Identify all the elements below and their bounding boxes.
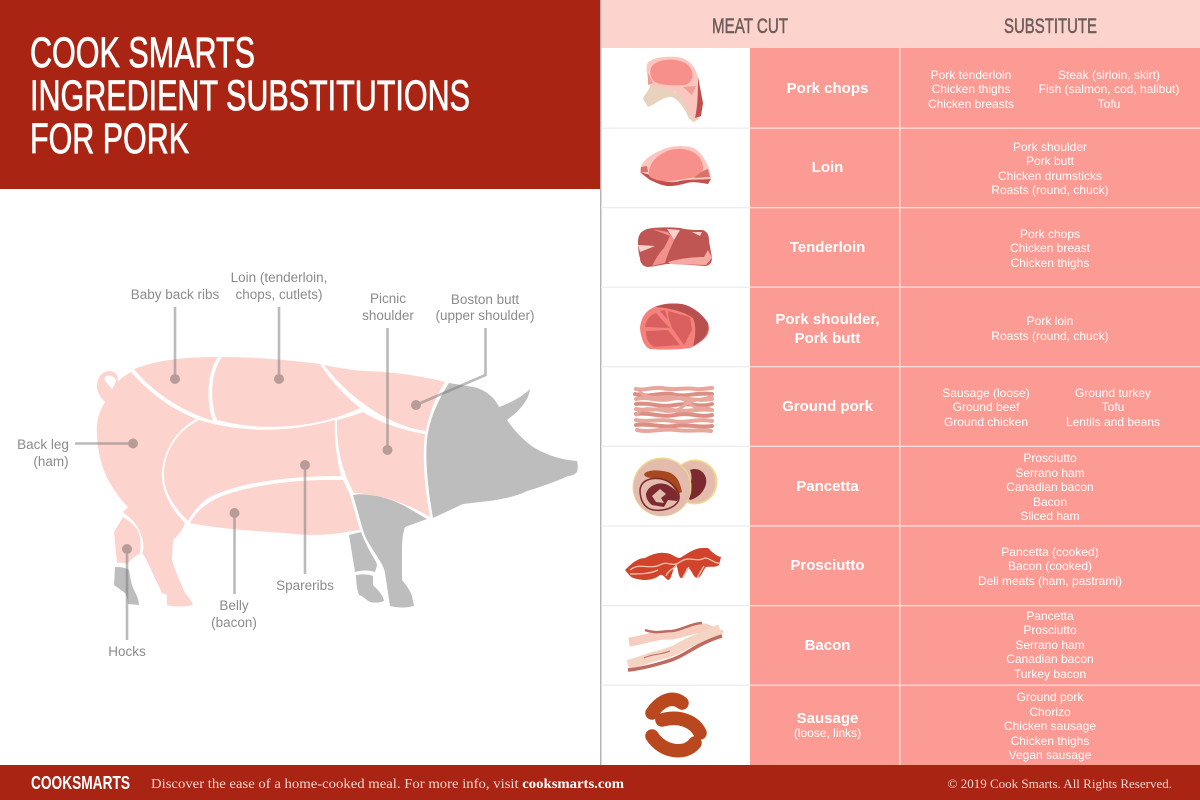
- row: ground pork: Ground pork: [782, 398, 874, 415]
- row: sausage: (loose, links): [794, 726, 861, 740]
- row: sausage: Vegan sausage: [1009, 748, 1092, 762]
- table background: [600, 0, 1200, 765]
- row: pork chops: Chicken breasts: [928, 97, 1014, 111]
- row: pork chops: Fish (salmon, cod, halibut): [1039, 82, 1179, 96]
- icon: pork chop: [643, 57, 703, 122]
- icon: loin: [640, 146, 711, 186]
- row: loin: [640, 140, 1109, 197]
- row: pork shoulder: Pork butt: [795, 330, 860, 347]
- cut labels: Loin (tenderloin,: [231, 270, 327, 285]
- row: pork chops: Tofu: [1098, 97, 1120, 111]
- row: ground pork: Sausage (loose): [942, 386, 1030, 400]
- row: pork chops: [643, 57, 1179, 122]
- row: pancetta: Bacon: [1033, 495, 1067, 509]
- footer: [0, 765, 1200, 800]
- pig cut: spareribs: [164, 420, 341, 521]
- copyright: © 2019 Cook Smarts. All Rights Reserved.: [948, 776, 1172, 791]
- icon: pancetta: [632, 458, 718, 516]
- icon: prosciutto: [625, 548, 721, 580]
- cut labels: (ham): [33, 454, 69, 469]
- pig cut: hoof back: [114, 567, 139, 605]
- row: pork chops: Pork chops: [787, 80, 868, 97]
- pig cut: picnic shoulder: [337, 412, 430, 517]
- cut labels: Back leg: [17, 437, 69, 452]
- row: pork chops: Chicken thighs: [932, 82, 1010, 96]
- cut labels: shoulder: [362, 308, 414, 323]
- row: sausage: Sausage: [797, 710, 858, 727]
- row: bacon: Turkey bacon: [1014, 667, 1086, 681]
- pig cut: hock: [114, 517, 141, 564]
- row: bacon: Pancetta: [1026, 609, 1074, 623]
- pig cut: baby back ribs: [134, 357, 218, 421]
- cut labels: [17, 270, 535, 659]
- pig front leg: [353, 494, 427, 608]
- pig cut: back leg (ham): [97, 371, 196, 606]
- row: ground pork: Ground turkey: [1075, 386, 1151, 400]
- row: loin: Pork butt: [1026, 154, 1075, 168]
- cut labels: Boston butt: [451, 292, 519, 307]
- icon: sausage: [652, 699, 700, 751]
- icon: bacon: [628, 623, 722, 670]
- row: ground pork: Ground chicken: [944, 415, 1028, 429]
- row: loin: Loin: [812, 159, 843, 176]
- table header: SUBSTITUTE: [1004, 15, 1097, 38]
- cut labels: Belly: [219, 598, 249, 613]
- row: pork chops: Steak (sirloin, skirt): [1058, 68, 1160, 82]
- row: pancetta: Serrano ham: [1015, 466, 1085, 480]
- row: pancetta: [632, 451, 1094, 523]
- row: pancetta: Sliced ham: [1020, 509, 1080, 523]
- row: loin: Roasts (round, chuck): [991, 183, 1109, 197]
- row: loin: Chicken drumsticks: [998, 169, 1102, 183]
- table header: [600, 0, 1200, 48]
- row: pork shoulder: Roasts (round, chuck): [991, 329, 1109, 343]
- title banner: INGREDIENT SUBSTITUTIONS: [30, 72, 470, 120]
- row: prosciutto: Bacon (cooked): [1008, 559, 1092, 573]
- icon: pork shoulder: [640, 303, 709, 350]
- row: pancetta: Canadian bacon: [1006, 480, 1094, 494]
- row: sausage: Chicken thighs: [1011, 734, 1089, 748]
- cut labels: Baby back ribs: [131, 287, 220, 302]
- row: bacon: [628, 609, 1094, 681]
- table header: MEAT CUT: [712, 15, 788, 38]
- row: sausage: [652, 690, 1096, 762]
- pig head: [426, 383, 578, 518]
- row: pork shoulder: [640, 303, 1109, 350]
- row: bacon: Prosciutto: [1023, 623, 1077, 637]
- row: pork shoulder: Pork loin: [1027, 314, 1073, 328]
- row: tenderloin: Chicken thighs: [1011, 256, 1089, 270]
- row: tenderloin: Tenderloin: [790, 239, 865, 256]
- cut labels: (bacon): [211, 615, 257, 630]
- row: tenderloin: Pork chops: [1020, 227, 1080, 241]
- row: bacon: Canadian bacon: [1006, 652, 1094, 666]
- icon: tenderloin: [638, 227, 712, 267]
- pig cut: loin: [212, 357, 360, 427]
- connector lines and dots: [75, 307, 486, 640]
- pig diagram: [97, 357, 578, 608]
- logo: COOKSMARTS: [31, 773, 130, 793]
- row: ground pork: Ground beef: [953, 400, 1020, 414]
- cut labels: Picnic: [370, 291, 406, 306]
- tagline: Discover the ease of a home-cooked meal. For more info, visit cooksmarts.com: [151, 777, 624, 792]
- title banner: COOK SMARTS: [30, 29, 255, 77]
- row: bacon: Bacon: [805, 637, 850, 654]
- row: sausage: Chorizo: [1029, 705, 1071, 719]
- row: tenderloin: Chicken breast: [1010, 241, 1091, 255]
- icon: ground pork: [635, 388, 712, 431]
- row: bacon: Serrano ham: [1015, 638, 1085, 652]
- row: prosciutto: Deli meats (ham, pastrami): [978, 574, 1122, 588]
- cut labels: Hocks: [108, 644, 146, 659]
- row: sausage: Ground pork: [1017, 690, 1084, 704]
- row: prosciutto: [625, 545, 1122, 588]
- row: prosciutto: Prosciutto: [790, 557, 865, 574]
- row: loin: Pork shoulder: [1013, 140, 1087, 154]
- row: ground pork: [635, 386, 1160, 431]
- title banner: [0, 0, 600, 189]
- cut labels: Spareribs: [276, 578, 334, 593]
- row: pancetta: Prosciutto: [1023, 451, 1077, 465]
- pig rear front leg: [349, 532, 384, 603]
- pig cut: boston butt: [324, 365, 445, 431]
- row: pork shoulder: Pork shoulder,: [775, 311, 880, 328]
- row: pancetta: Pancetta: [796, 478, 859, 495]
- title banner: FOR PORK: [30, 115, 189, 163]
- row: tenderloin: [638, 227, 1091, 270]
- pig cut: belly: [190, 480, 360, 535]
- row: sausage: Chicken sausage: [1004, 719, 1096, 733]
- cut labels: (upper shoulder): [435, 308, 535, 323]
- cut labels: chops, cutlets): [235, 287, 323, 302]
- row: prosciutto: Pancetta (cooked): [1001, 545, 1099, 559]
- row: ground pork: Tofu: [1102, 400, 1124, 414]
- row: ground pork: Lentils and beans: [1066, 415, 1160, 429]
- row: pork chops: Pork tenderloin: [931, 68, 1011, 82]
